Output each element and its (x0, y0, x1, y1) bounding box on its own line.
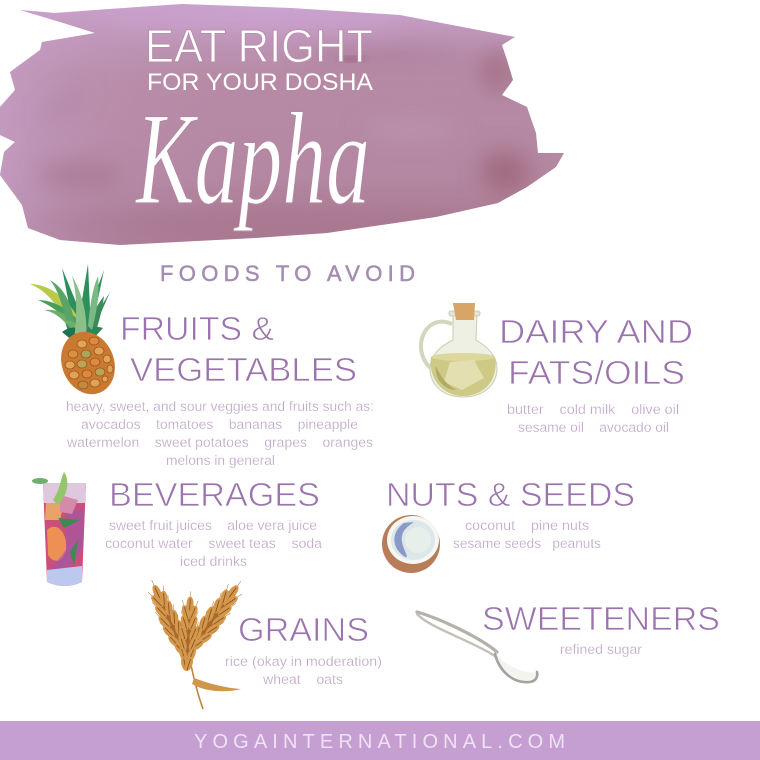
header watercolor brush stroke (0, 0, 570, 250)
food list: coconut pine nuts (465, 518, 589, 533)
food list: butter cold milk olive oil (507, 402, 679, 417)
icon: spoon (417, 612, 537, 682)
subheading: foods to avoid: FOODS TO AVOID (160, 261, 415, 286)
food list: melons in general (166, 453, 275, 468)
icon: wheat (140, 573, 252, 709)
section: grains (140, 573, 382, 709)
icon: oil jar (421, 303, 497, 397)
food list: heavy, sweet, and sour veggies and fruits such as: (66, 399, 374, 414)
food list: sesame seeds peanuts (453, 536, 601, 551)
food list (507, 402, 679, 435)
icon: coconut (374, 507, 448, 581)
heading: vegetables: VEGETABLES (130, 351, 357, 388)
footer band (0, 721, 760, 760)
section: sweeteners (417, 600, 720, 682)
section: dairy and fats/oils (421, 303, 693, 435)
heading: nuts and seeds: NUTS & SEEDS (386, 476, 635, 513)
food list: wheat oats (262, 672, 343, 687)
heading: For Your Dosha: FOR YOUR DOSHA (147, 69, 373, 96)
food list: refined sugar (560, 642, 643, 657)
food list (453, 518, 601, 551)
section: fruits and vegetables (30, 264, 374, 468)
food list (225, 654, 382, 687)
heading: Eat Right: EAT RIGHT (145, 20, 373, 72)
food list: sweet fruit juices aloe vera juice (109, 518, 317, 533)
icon: cocktail glass (32, 472, 86, 586)
food list: rice (okay in moderation) (225, 654, 382, 669)
heading: sweeteners: SWEETENERS (482, 600, 720, 637)
heading: fruits and: FRUITS & (120, 310, 274, 347)
food list (66, 399, 374, 468)
icon: pineapple (30, 264, 124, 402)
food list: coconut water sweet teas soda (105, 536, 323, 551)
heading: beverages: BEVERAGES (109, 476, 320, 513)
food list (105, 518, 323, 569)
food list: sesame oil avocado oil (518, 420, 669, 435)
heading: grains: GRAINS (238, 611, 369, 648)
heading: dairy and: DAIRY AND (499, 313, 693, 350)
section: nuts and seeds (374, 476, 635, 581)
food list: watermelon sweet potatoes grapes oranges (66, 435, 373, 450)
heading: fats/oils: FATS/OILS (508, 354, 685, 391)
heading: Kapha: Kapha (135, 85, 370, 232)
food list: iced drinks (180, 554, 247, 569)
section: beverages (32, 472, 323, 586)
food list: avocados tomatoes bananas pineapple (81, 417, 358, 432)
footer url: YOGAINTERNATIONAL.COM (194, 731, 565, 753)
